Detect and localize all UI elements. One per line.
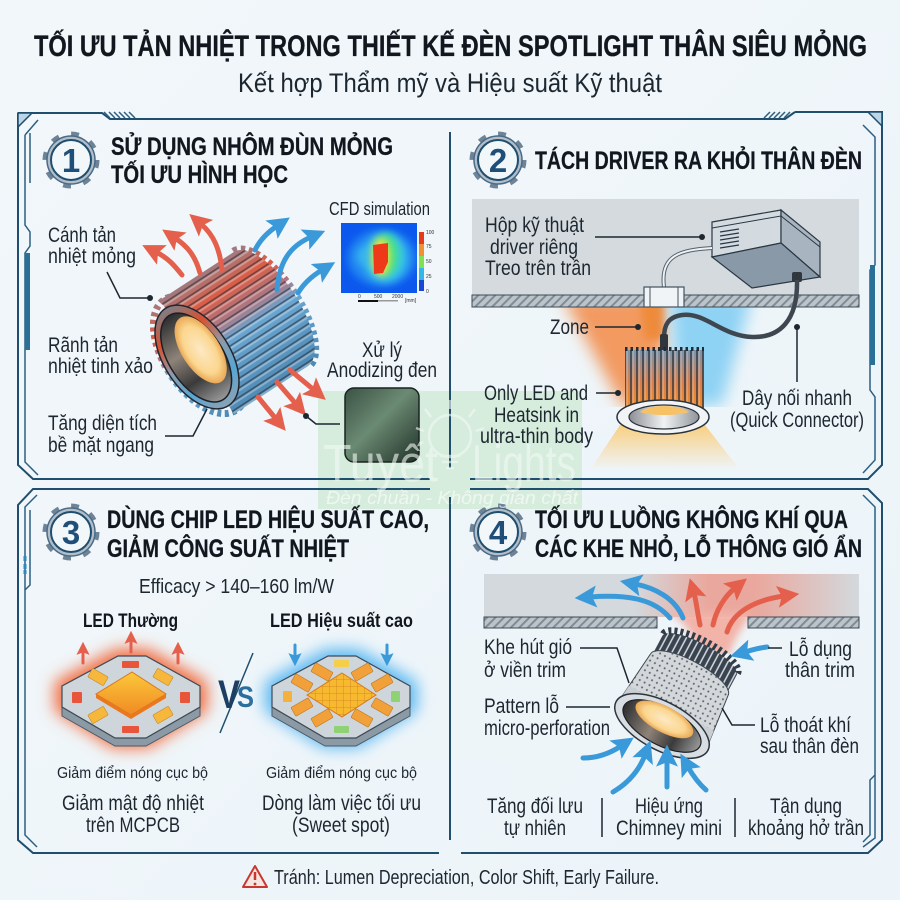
CFD simulation: 500 bbox=[374, 294, 383, 300]
panel: 3 high efficacy LED bbox=[44, 504, 429, 837]
quick connector cable bbox=[660, 280, 797, 352]
heat arrows bbox=[156, 224, 322, 419]
VS mark: S bbox=[237, 681, 254, 714]
labels left: Cánh tản bbox=[48, 224, 116, 247]
captions: Giảm mật độ nhiệt bbox=[62, 792, 204, 815]
watermark text: Đèn chuần - Không gian chất bbox=[326, 488, 579, 508]
captions bbox=[62, 792, 421, 837]
panel: 2 separate driver bbox=[472, 134, 864, 470]
labels 2: Zone bbox=[550, 316, 589, 339]
CFD simulation: 25 bbox=[426, 274, 432, 280]
CFD simulation: 75 bbox=[426, 244, 432, 250]
icon: warning triangle bbox=[243, 866, 267, 887]
benefits row: tự nhiên bbox=[504, 817, 566, 840]
VS mark: V bbox=[218, 673, 240, 717]
benefits row: khoảng hở trần bbox=[748, 817, 864, 840]
panel: 1 aluminium heatsink bbox=[44, 131, 437, 462]
anodizing label: Anodizing đen bbox=[327, 359, 437, 382]
driver box bbox=[712, 210, 820, 288]
benefits row bbox=[487, 795, 864, 840]
small captions: Giảm điểm nóng cục bộ bbox=[57, 764, 208, 782]
footer warning: Tránh: Lumen Depreciation, Color Shift, Early Failure. bbox=[274, 867, 659, 889]
anodizing label bbox=[327, 339, 437, 382]
ceiling void bbox=[484, 574, 859, 617]
badge 2 bbox=[472, 134, 524, 186]
panel: 4 airflow bbox=[472, 504, 864, 840]
labels 4: thân trim bbox=[785, 659, 855, 682]
labels 2 bbox=[480, 214, 864, 448]
small captions bbox=[57, 764, 417, 782]
labels left: Tăng diện tích bbox=[48, 412, 157, 435]
column headings: LED Thường bbox=[83, 611, 178, 632]
CFD simulation bbox=[329, 199, 435, 304]
badge 4 bbox=[472, 506, 524, 558]
badge 4: 4 bbox=[489, 514, 508, 551]
heading 1 bbox=[111, 131, 393, 189]
watermark panel bbox=[318, 391, 582, 509]
small captions: Giảm điểm nóng cục bộ bbox=[266, 764, 417, 782]
CFD simulation: 2000 bbox=[392, 294, 403, 300]
labels 2: Heatsink in bbox=[494, 404, 579, 427]
labels 4: ở viền trim bbox=[484, 659, 566, 682]
badge 2: 2 bbox=[489, 142, 507, 179]
ceiling void bbox=[472, 199, 859, 295]
efficacy: Efficacy > 140–160 lm/W bbox=[139, 576, 334, 598]
labels 4: Pattern lỗ bbox=[484, 695, 559, 718]
benefits row: Chimney mini bbox=[616, 817, 722, 840]
heatsink illustration bbox=[132, 237, 331, 432]
benefits row: Tận dụng bbox=[770, 795, 842, 818]
heading 3: GIẢM CÔNG SUẤT NHIỆT bbox=[107, 533, 349, 563]
labels left: nhiệt mỏng bbox=[48, 245, 136, 268]
heading 3: DÙNG CHIP LED HIỆU SUẤT CAO, bbox=[107, 504, 429, 534]
high efficacy LED board bbox=[272, 645, 410, 746]
heading 3 bbox=[107, 504, 429, 563]
anodized swatch bbox=[345, 388, 419, 462]
labels 4: Lỗ thoát khí bbox=[760, 714, 851, 737]
labels 2: ultra-thin body bbox=[480, 425, 593, 448]
subtitle: Kết hợp Thẩm mỹ và Hiệu suất Kỹ thuật bbox=[238, 68, 662, 98]
watermark text: Lights bbox=[472, 435, 576, 493]
captions: (Sweet spot) bbox=[292, 814, 390, 837]
benefits row: Hiệu ứng bbox=[635, 795, 703, 818]
CFD simulation: 100 bbox=[426, 230, 435, 236]
labels 4 bbox=[484, 636, 859, 758]
labels left bbox=[48, 224, 157, 457]
labels left: nhiệt tinh xảo bbox=[48, 355, 153, 378]
labels 2: Only LED and bbox=[484, 382, 588, 405]
badge 3: 3 bbox=[62, 514, 80, 551]
hot plume bbox=[672, 612, 748, 654]
badge 3 bbox=[44, 506, 98, 558]
VS mark bbox=[218, 653, 254, 733]
CFD simulation: 50 bbox=[426, 259, 432, 265]
leaders 4 bbox=[566, 648, 782, 725]
labels left: Rãnh tản bbox=[48, 334, 118, 357]
benefits row: Tăng đối lưu bbox=[487, 795, 583, 818]
heading 4 bbox=[535, 504, 862, 563]
CFD simulation: 0 bbox=[426, 289, 429, 295]
labels 2: Treo trên trần bbox=[485, 257, 591, 280]
leaders bbox=[107, 272, 340, 436]
thermal zone glow bbox=[562, 296, 752, 405]
captions: Dòng làm việc tối ưu bbox=[262, 792, 421, 815]
labels 2: Dây nối nhanh bbox=[742, 387, 852, 410]
CFD simulation: CFD simulation bbox=[329, 199, 430, 219]
CFD simulation: [mm] bbox=[405, 298, 417, 304]
watermark text: Tuyết bbox=[323, 435, 438, 493]
airflow arrows top bbox=[590, 584, 784, 632]
slim lamp bbox=[590, 349, 740, 470]
column headings bbox=[83, 611, 413, 632]
labels 2: Hộp kỹ thuật bbox=[485, 214, 584, 237]
labels left: bề mặt ngang bbox=[48, 434, 154, 457]
watermark text bbox=[323, 400, 579, 508]
labels 4: Khe hút gió bbox=[484, 636, 572, 659]
anodizing label: Xử lý bbox=[362, 339, 402, 362]
heading 1: TỐI ƯU HÌNH HỌC bbox=[111, 159, 288, 189]
labels 4: micro-perforation bbox=[484, 717, 610, 740]
labels 2: driver riêng bbox=[490, 236, 578, 259]
labels 4: Lỗ dụng bbox=[789, 638, 852, 661]
ceiling slab bbox=[472, 295, 859, 307]
standard LED board bbox=[62, 640, 200, 746]
badge 1: 1 bbox=[62, 142, 80, 179]
badge 1 bbox=[44, 134, 98, 186]
title bbox=[34, 29, 867, 98]
airflow arrows bottom bbox=[583, 647, 767, 792]
panel frames bbox=[18, 112, 882, 853]
captions: trên MCPCB bbox=[86, 814, 180, 837]
white cable and junction bbox=[644, 248, 712, 307]
leaders 2 bbox=[595, 234, 800, 396]
perforated lamp bbox=[605, 618, 753, 772]
column headings: LED Hiệu suất cao bbox=[270, 611, 413, 632]
labels 2: (Quick Connector) bbox=[730, 409, 864, 432]
heading 1: SỬ DỤNG NHÔM ĐÙN MỎNG bbox=[111, 131, 393, 161]
ceiling slabs bbox=[484, 617, 859, 628]
CFD simulation: 0 bbox=[358, 294, 361, 300]
labels 4: sau thân đèn bbox=[760, 735, 859, 758]
